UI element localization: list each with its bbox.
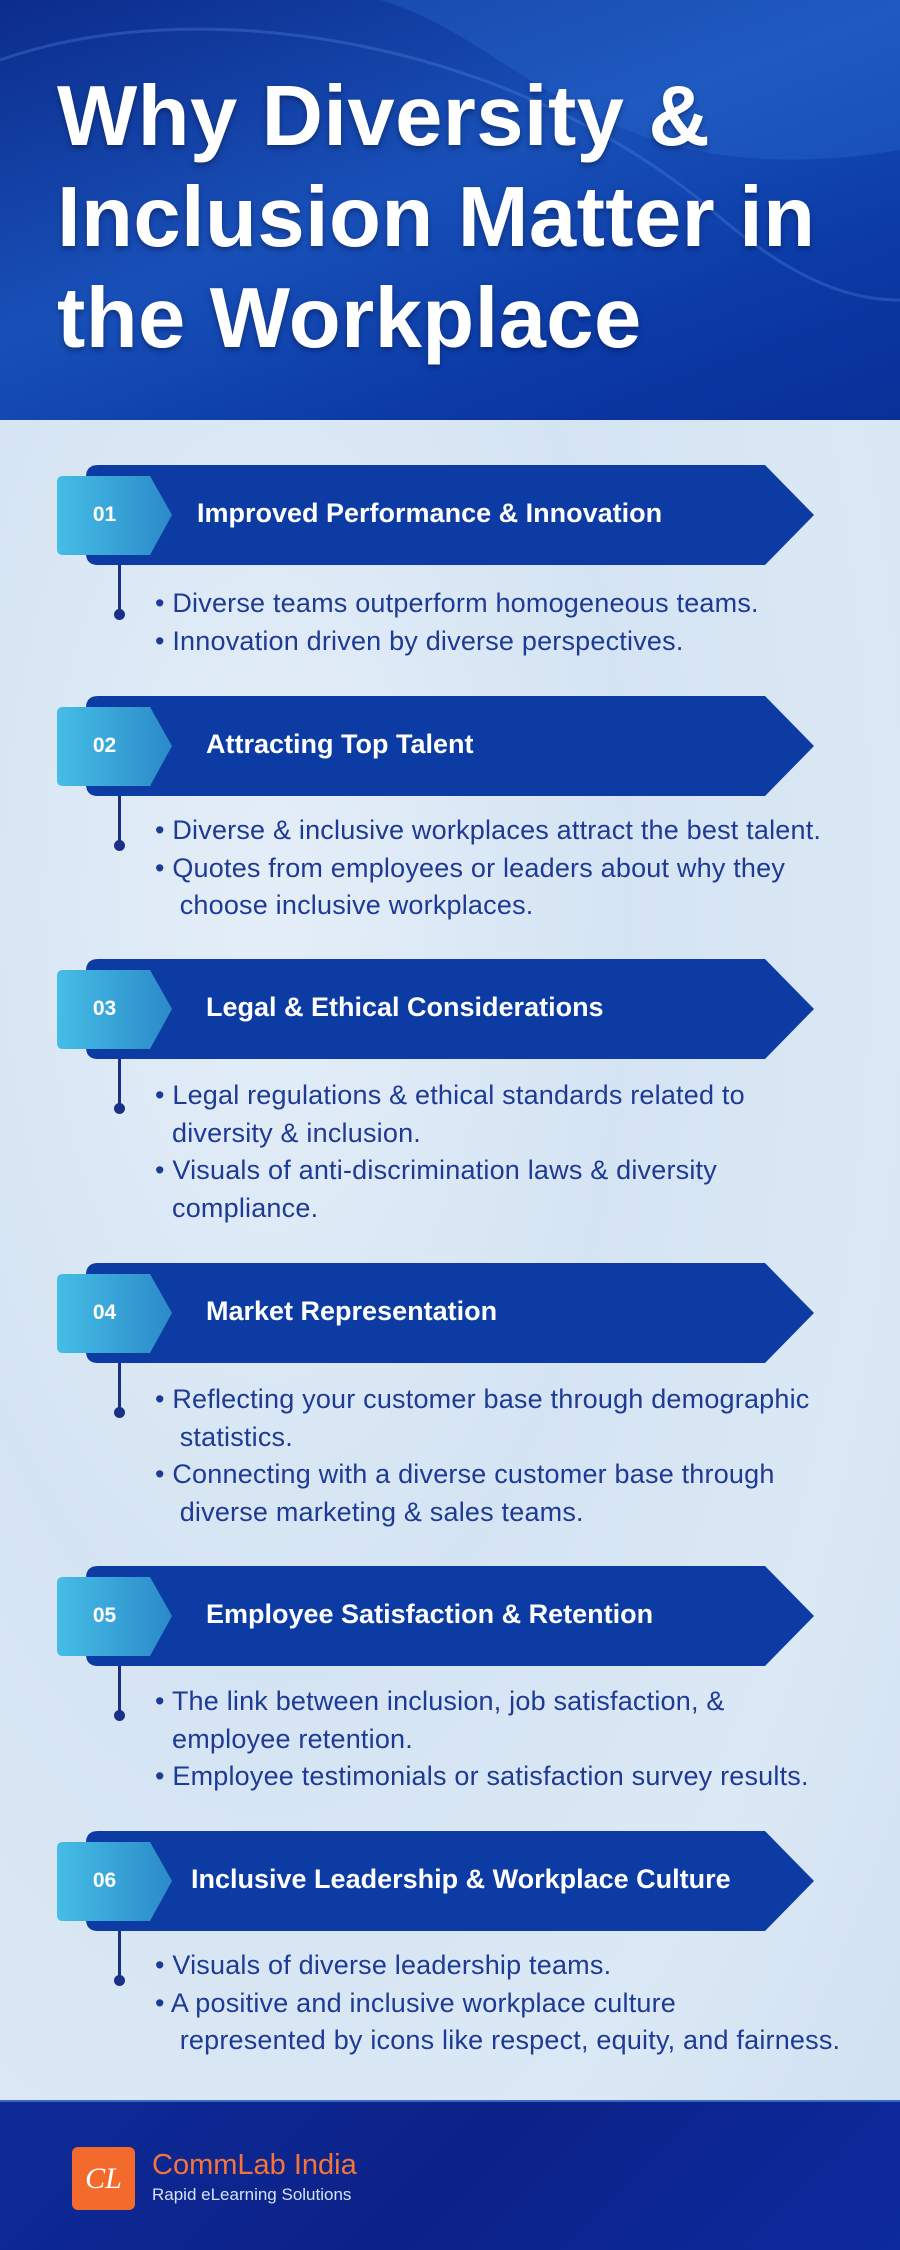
section 03: 03 [93,997,116,1020]
bullets 01 [155,588,759,656]
section 03 [57,959,814,1222]
title [56,69,816,370]
brand name: CommLab India [152,2149,357,2181]
section 05 [57,1566,814,1791]
section 02 [57,696,821,920]
bullets 05: employee retention. [172,1724,413,1754]
heading 06: Inclusive Leadership & Workplace Culture [191,1864,731,1894]
section 06 [57,1831,840,2055]
bullets 02: choose inclusive workplaces. [180,890,533,920]
bullets 04: diverse marketing & sales teams. [180,1496,584,1526]
heading 02: Attracting Top Talent [206,729,473,759]
bullets 06: • A positive and inclusive workplace culture [155,1988,676,2018]
banner 06 [57,1831,814,1931]
bullets 03: compliance. [172,1192,318,1222]
bullets 02: • Diverse & inclusive workplaces attract the best talent. [155,815,821,845]
section 06: 06 [93,1869,116,1892]
banner 02 [57,696,814,796]
logo [72,2147,357,2210]
section 01: 01 [93,503,116,526]
section 04 [57,1263,814,1526]
bullets 06: • Visuals of diverse leadership teams. [155,1950,611,1980]
heading 01: Improved Performance & Innovation [197,498,662,528]
bullets 05: • The link between inclusion, job satisfaction, & [155,1686,725,1716]
section 04: 04 [93,1301,116,1324]
title: Inclusion Matter in [57,170,816,265]
icon: CL logo [72,2147,135,2210]
banner 05 [57,1566,814,1666]
bullets 02 [155,815,821,920]
footer [0,2100,900,2250]
header [0,0,900,420]
title: Why Diversity & [57,69,710,164]
bullets 04: statistics. [180,1422,293,1452]
bullets 05: • Employee testimonials or satisfaction survey results. [155,1761,809,1791]
bullets 03: • Visuals of anti-discrimination laws & diversity [155,1155,717,1185]
bullets 04: • Reflecting your customer base through demographic [155,1384,810,1414]
bullets 04: • Connecting with a diverse customer base through [155,1459,775,1489]
bullets 06 [155,1950,840,2055]
section 05: 05 [93,1604,116,1627]
bullets 03: • Legal regulations & ethical standards related to [155,1080,745,1110]
heading 04: Market Representation [206,1296,497,1326]
heading 05: Employee Satisfaction & Retention [206,1599,653,1629]
banner 03 [57,959,814,1059]
bullets 06: represented by icons like respect, equity, and fairness. [180,2025,840,2055]
bullets 02: • Quotes from employees or leaders about why they [155,852,785,882]
bullets 01: • Innovation driven by diverse perspectives. [155,626,684,656]
bullets 03 [155,1080,745,1222]
icon: CL logo: CL [85,2162,122,2195]
section 02: 02 [93,734,116,757]
banner 01 [57,465,814,565]
title: the Workplace [57,271,642,366]
bullets 03: diversity & inclusion. [172,1118,421,1148]
bullets 05 [155,1686,809,1791]
bullets 04 [155,1384,810,1526]
tagline: Rapid eLearning Solutions [152,2185,351,2204]
bullets 01: • Diverse teams outperform homogeneous teams. [155,588,759,618]
banner 04 [57,1263,814,1363]
heading 03: Legal & Ethical Considerations [206,992,604,1022]
section 01 [57,465,814,656]
